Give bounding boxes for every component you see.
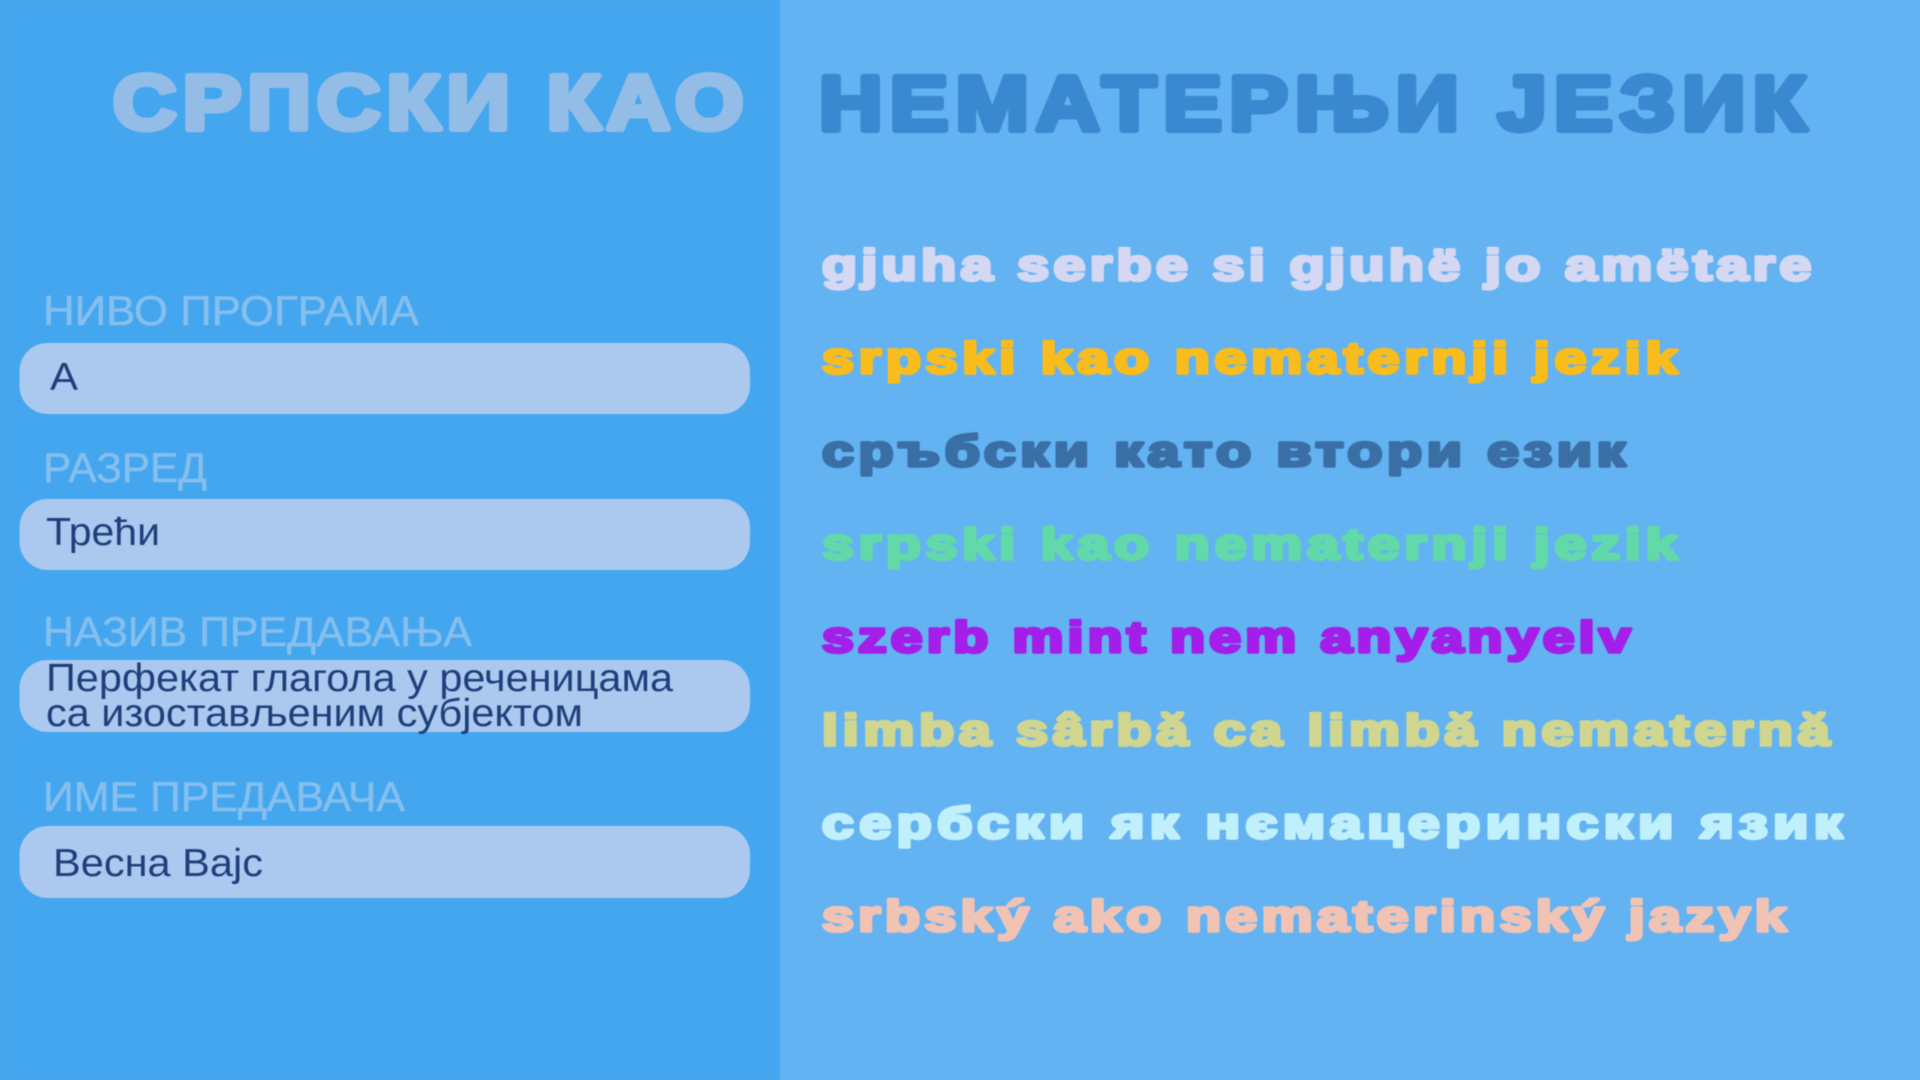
field box <box>20 826 750 898</box>
value line 1: Перфекат глагола у реченицама <box>46 657 673 700</box>
field: lecturer name <box>20 773 750 898</box>
language: Slovak: srbský ako nematerinský jazyk <box>822 891 1787 940</box>
value line 2: са изостављеним субјектом <box>46 692 583 735</box>
field label: НАЗИВ ПРЕДАВАЊА <box>43 608 472 655</box>
field value <box>46 657 673 735</box>
field value: А <box>50 356 78 399</box>
field: program level <box>20 287 750 414</box>
field label: НИВО ПРОГРАМА <box>43 287 419 334</box>
panel: left background <box>0 0 780 1080</box>
field box <box>20 660 750 732</box>
language: Rusyn: сербски як нємацерински язик <box>822 798 1843 847</box>
panel: language name list <box>822 240 1843 940</box>
language: Hungarian: szerb mint nem anyanyelv <box>822 612 1631 661</box>
field: grade <box>20 444 750 570</box>
panel: lesson details form <box>20 287 750 898</box>
field box <box>20 343 750 414</box>
language: Serbian latin, orange: srpski kao nematernji jezik <box>822 333 1678 382</box>
title: left part: СРПСКИ КАО <box>113 60 743 146</box>
language: Bulgarian: сръбски като втори език <box>822 426 1626 475</box>
language: Romanian: limba sârbă ca limbă nematernă <box>822 705 1830 754</box>
title <box>113 60 1807 147</box>
language: Albanian: gjuha serbe si gjuhë jo amëtare <box>822 240 1811 289</box>
field: lecture title <box>20 608 750 735</box>
panel: right background <box>780 0 1920 1080</box>
title: right part: НЕМАТЕРЊИ ЈЕЗИК <box>819 61 1807 147</box>
field value: Трећи <box>46 511 160 554</box>
field value: Весна Вајс <box>53 842 263 885</box>
language: Serbian latin, green: srpski kao nematernji jezik <box>822 519 1678 568</box>
field box <box>20 499 750 570</box>
field label: ИМЕ ПРЕДАВАЧА <box>43 773 405 820</box>
field label: РАЗРЕД <box>43 444 207 491</box>
